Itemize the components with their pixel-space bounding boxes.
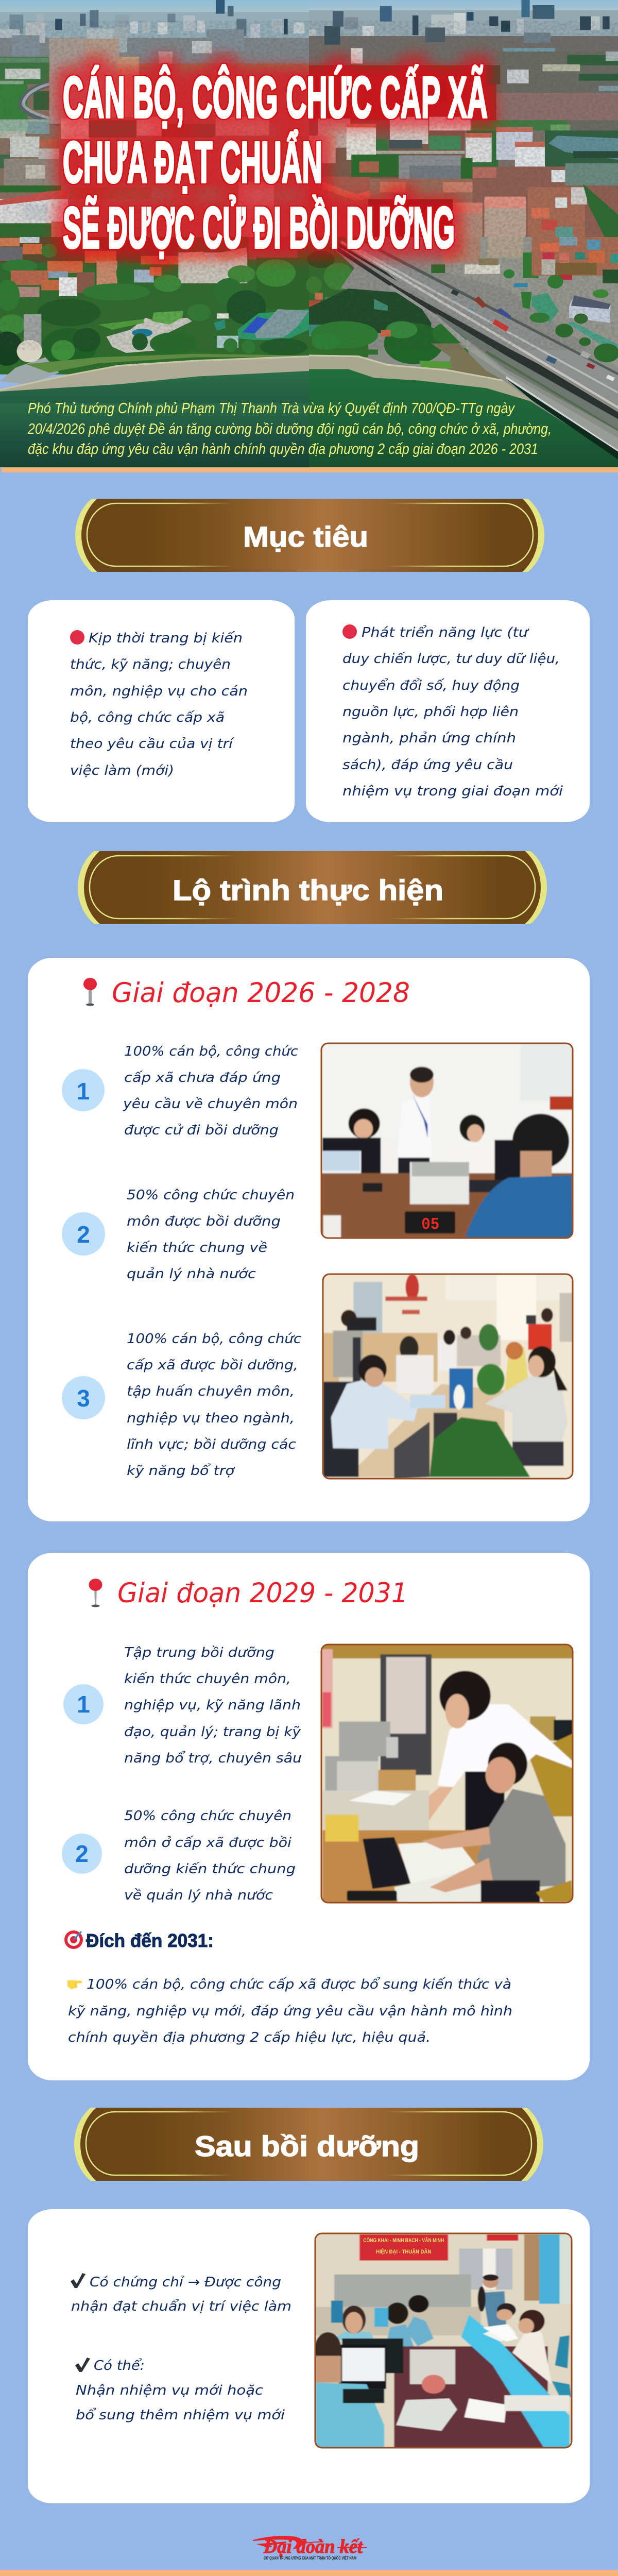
intro text [27, 400, 552, 457]
objective 1 text [70, 631, 248, 778]
step 2 number [62, 1212, 105, 1256]
new tasks text: Nhận nhiệm vụ mới hoặc [76, 2383, 263, 2398]
step 1 text: kiến thức chuyên môn, [124, 1671, 291, 1687]
target text: chính quyền địa phương 2 cấp hiệu lực, hiệu quả. [68, 2030, 431, 2045]
objective 2 text: ngành, phản ứng chính [342, 731, 516, 746]
banner: Sau bồi dưỡng [74, 2097, 543, 2191]
step 2 text: môn ở cấp xã được bồi [124, 1835, 292, 1851]
icon: red bullet [342, 624, 357, 639]
target heading: Đích đến 2031: [86, 1930, 214, 1951]
step 3 text: 100% cán bộ, công chức [127, 1331, 301, 1347]
panel: after training [28, 2209, 590, 2503]
step 2 text: dưỡng kiến thức chung [124, 1861, 296, 1877]
step 2 text [127, 1188, 295, 1282]
objective 1 text: bộ, công chức cấp xã [70, 710, 225, 725]
new tasks text: Có thể: [94, 2358, 145, 2374]
orange divider stripe [2, 467, 618, 472]
photo: two officials at a computer [321, 1644, 573, 1903]
step 2 text [124, 1808, 296, 1903]
step 2 number [62, 1834, 102, 1874]
photo frame 3 [321, 1645, 573, 1903]
target text: kỹ năng, nghiệp vụ mới, đáp ứng yêu cầu vận hành mô hình [68, 2004, 512, 2019]
objective 2 text: nhiệm vụ trong giai đoạn mới [342, 784, 563, 799]
photo: office counter with staff: HIỆN ĐẠI - THUẬN DÂN [376, 2248, 431, 2255]
objective 2 text: duy chiến lược, tư duy dữ liệu, [342, 651, 560, 667]
bottom orange stripe [0, 2570, 618, 2576]
step 3 text: nghiệp vụ theo ngành, [127, 1411, 295, 1426]
objective 2 text: Phát triển năng lực (tư [362, 624, 529, 640]
photo: officials at a service desk: 05 [421, 1215, 439, 1234]
step 3 text [127, 1331, 301, 1479]
photo: public service centre counters [322, 1274, 573, 1479]
new tasks text: bổ sung thêm nhiệm vụ mới [76, 2407, 285, 2423]
step 1 text: đạo, quản lý; trang bị kỹ [124, 1724, 301, 1740]
banner: Mục tiêu: Mục tiêu [243, 520, 368, 553]
panel: objective 2 [306, 600, 590, 822]
panel: phase 2029-2031 [28, 1553, 590, 2080]
icon: check mark 2 [75, 2358, 90, 2372]
step 2 text: môn được bồi dưỡng [127, 1214, 281, 1229]
objective 1 text: thức, kỹ năng; chuyên [70, 657, 231, 672]
objective 1 text: môn, nghiệp vụ cho cán [70, 684, 248, 699]
icon: map pin [89, 1579, 102, 1607]
banner: Lộ trình thực hiện: Lộ trình thực hiện [173, 874, 443, 906]
certificate text: nhận đạt chuẩn vị trí việc làm [71, 2298, 291, 2314]
panel: objective 1 [28, 600, 295, 822]
objective 2 text: sách), đáp ứng yêu cầu [342, 757, 513, 773]
step 2 text: về quản lý nhà nước [124, 1888, 273, 1903]
photo frame 1 [321, 1043, 573, 1238]
icon: target [64, 1930, 83, 1949]
step 1 text [124, 1645, 302, 1766]
intro text: đặc khu đáp ứng yêu cầu vận hành chính quyền địa phương 2 cấp giai đoạn 2026 - 2031 [28, 441, 538, 457]
step 3 text: lĩnh vực; bồi dưỡng các [127, 1437, 296, 1452]
photo: office counter with staff [315, 2233, 572, 2448]
objective 1 text: việc làm (mới) [70, 763, 174, 778]
step 1 text: yêu cầu về chuyên môn [123, 1096, 298, 1112]
photo: office counter with staff: CÔNG KHAI - MINH BẠCH - VĂN MINH [363, 2237, 444, 2244]
step 3 text: tập huấn chuyên môn, [127, 1384, 295, 1399]
step 3 number [62, 1376, 105, 1419]
logo: Đại đoàn kết: CƠ QUAN TRUNG ƯƠNG CỦA MẶT TRẬN TỔ QUỐC VIỆT NAM [264, 2555, 356, 2561]
icon: pointing hand [67, 1980, 82, 1989]
objective 2 text: chuyển đổi số, huy động [342, 677, 520, 693]
objective 2 text: nguồn lực, phối hợp liên [342, 704, 519, 720]
step 2 text: quản lý nhà nước [127, 1266, 256, 1282]
step 1 text: 100% cán bộ, công chức [124, 1044, 298, 1059]
objective 1 text: Kịp thời trang bị kiến [89, 631, 243, 646]
title: CHƯA ĐẠT CHUẨN [63, 130, 322, 195]
intro text: Phó Thủ tướng Chính phủ Phạm Thị Thanh Trà vừa ký Quyết định 700/QĐ-TTg ngày [28, 400, 515, 417]
panel: phase 2026-2028 [28, 958, 590, 1521]
new tasks text [76, 2358, 285, 2423]
step 2 number: 2 [75, 1840, 89, 1867]
step 1 text: được cử đi bồi dưỡng [124, 1123, 279, 1138]
step 1 number [62, 1069, 105, 1111]
icon: map pin [83, 978, 97, 1006]
step 2 text: 50% công chức chuyên [124, 1808, 291, 1824]
icon: check mark 1 [71, 2273, 85, 2288]
certificate text: Có chứng chỉ → Được công [90, 2275, 281, 2290]
step 2 text: 50% công chức chuyên [127, 1188, 295, 1203]
step 1 text: cấp xã chưa đáp ứng [124, 1070, 281, 1086]
banner: Sau bồi dưỡng: Sau bồi dưỡng [195, 2130, 419, 2162]
phase heading: Giai đoạn 2029 - 2031 [117, 1578, 408, 1609]
hero: aerial photo of the city [0, 0, 618, 474]
phase heading: Giai đoạn 2026 - 2028 [112, 977, 410, 1009]
step 1 number: 1 [77, 1078, 90, 1105]
step 1 text: nghiệp vụ, kỹ năng lãnh [124, 1698, 301, 1713]
step 3 text: cấp xã được bồi dưỡng, [127, 1358, 298, 1373]
step 3 text: kỹ năng bổ trợ [127, 1463, 235, 1479]
step 1 number [63, 1684, 104, 1724]
certificate text [71, 2275, 291, 2314]
icon: red bullet [70, 630, 84, 645]
photo: officials at a service desk [321, 1043, 573, 1238]
step 1 number: 1 [77, 1691, 90, 1718]
objective 1 text: theo yêu cầu của vị trí [70, 736, 235, 752]
step 3 number: 3 [77, 1385, 90, 1412]
target text: 100% cán bộ, công chức cấp xã được bổ sung kiến thức và [87, 1976, 511, 1992]
step 2 text: kiến thức chung về [127, 1240, 267, 1256]
photo frame 4 [315, 2233, 572, 2448]
objective 2 text [342, 624, 563, 799]
step 1 text: năng bổ trợ, chuyên sâu [124, 1750, 302, 1766]
step 1 text [123, 1044, 298, 1138]
step 1 text: Tập trung bồi dưỡng [124, 1645, 274, 1660]
target text [68, 1976, 512, 2045]
photo frame 2 [323, 1274, 573, 1479]
title [63, 65, 488, 260]
logo: Đại đoàn kết: Đại đoàn kết [263, 2536, 363, 2557]
banner: Mục tiêu [75, 499, 544, 572]
banner: Lộ trình thực hiện [78, 851, 547, 924]
step 2 number: 2 [77, 1221, 90, 1248]
